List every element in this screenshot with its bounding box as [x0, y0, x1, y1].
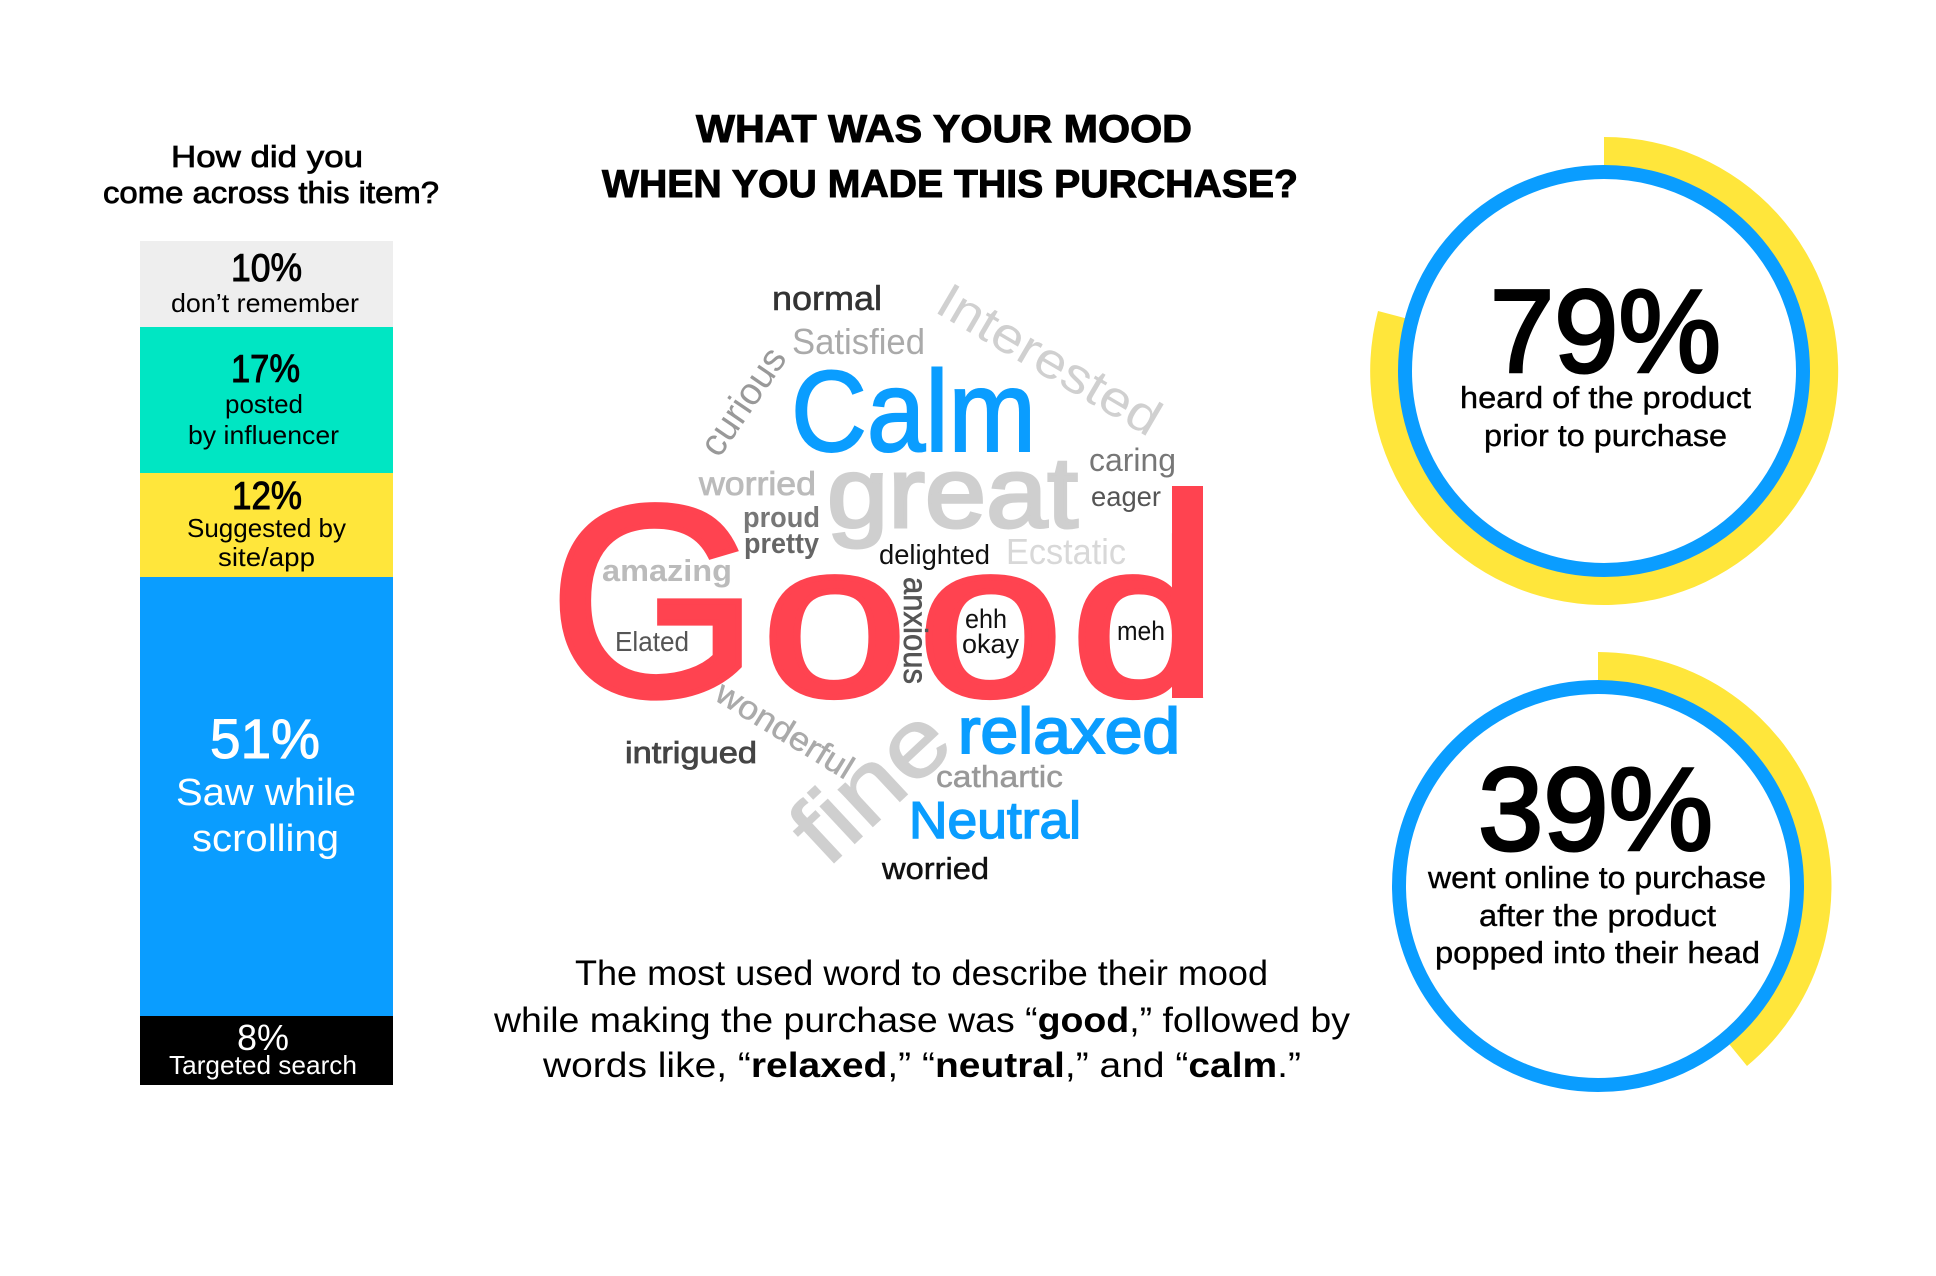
- segment: saw while scrolling 51%: Saw while: [176, 772, 356, 814]
- yellow progress arc 39%: [1598, 652, 1831, 1066]
- yellow progress arc 79%: [1370, 137, 1838, 605]
- remaining words: [602, 272, 1180, 886]
- caption: popped into their head: [1435, 935, 1760, 970]
- segment: posted by influencer 17%: posted: [225, 389, 303, 419]
- segment: saw while scrolling 51%: 51%: [210, 707, 320, 770]
- word: Ecstatic: Ecstatic: [1006, 531, 1126, 572]
- word: anxious: anxious: [897, 577, 934, 684]
- segment: suggested by site/app 12%: [140, 473, 393, 578]
- blue ring: [1405, 172, 1803, 570]
- blue ring: [1399, 687, 1797, 1085]
- summary paragraph: The most used word to describe their mood: [575, 954, 1268, 993]
- left heading: how did you come across this item: [103, 139, 439, 210]
- word: intrigued: intrigued: [625, 735, 757, 770]
- left heading: how did you come across this item: come across this item?: [103, 175, 439, 210]
- stat circle: 79% heard of the product: [1370, 137, 1838, 605]
- word: cathartic: cathartic: [936, 759, 1063, 794]
- caption: [1460, 380, 1751, 453]
- segment: suggested by site/app 12%: 12%: [232, 475, 302, 518]
- title: [602, 108, 1298, 206]
- segment: saw while scrolling 51%: scrolling: [192, 818, 339, 860]
- word: Good: G: [549, 449, 759, 753]
- summary paragraph: [493, 954, 1351, 1085]
- segment: suggested by site/app 12%: site/app: [218, 542, 315, 572]
- segment: targeted search 8%: Targeted search: [169, 1050, 357, 1080]
- word: normal: normal: [772, 280, 882, 318]
- word: pretty: pretty: [744, 528, 819, 560]
- word: okay: okay: [962, 629, 1019, 659]
- segment: posted by influencer 17%: 17%: [231, 348, 300, 391]
- word: Good: [549, 449, 1216, 753]
- word: fine: fine: [769, 685, 972, 884]
- word: Good: o: [762, 498, 907, 742]
- segment: posted by influencer 17%: [140, 327, 393, 474]
- word: proud: proud: [743, 502, 820, 534]
- segment: posted by influencer 17%: by influencer: [188, 420, 339, 450]
- caption: [1427, 860, 1766, 970]
- word: Satisfied: Satisfied: [792, 321, 925, 362]
- word: wonderful: wonderful: [708, 673, 861, 786]
- stacked bar chart: discovery source: [140, 241, 393, 1085]
- title: WHEN YOU MADE THIS PURCHASE?: [602, 163, 1298, 206]
- word cloud: [549, 272, 1216, 886]
- stat circle: 39% went online to purchase: [1399, 652, 1831, 1085]
- segment: don't remember 10%: [140, 241, 393, 327]
- word: eager: eager: [1091, 481, 1161, 512]
- caption: went online to purchase: [1427, 860, 1766, 895]
- segment: targeted search 8%: [140, 1016, 393, 1085]
- word: curious: curious: [692, 340, 795, 464]
- segment: targeted search 8%: 8%: [237, 1017, 289, 1058]
- word: worried (grey): worried: [698, 465, 816, 502]
- caption: after the product: [1479, 898, 1716, 933]
- word: Neutral: Neutral: [909, 792, 1081, 850]
- word: ehh: ehh: [965, 604, 1007, 634]
- caption: prior to purchase: [1484, 418, 1727, 453]
- caption: heard of the product: [1460, 380, 1751, 415]
- word: meh: meh: [1117, 616, 1165, 646]
- summary paragraph: words like, “ relaxed ,” “neutral ,” and “ calm .”: [542, 1046, 1301, 1085]
- word: delighted: delighted: [879, 539, 990, 570]
- word: great: great: [827, 437, 1078, 549]
- title: WHAT WAS YOUR MOOD: [696, 108, 1192, 151]
- segment: don't remember 10%: don’t remember: [171, 288, 359, 318]
- word: worried (black): worried: [881, 851, 989, 886]
- figure 39%: 39%: [1478, 744, 1713, 876]
- segment: don't remember 10%: 10%: [231, 247, 302, 290]
- segment: saw while scrolling 51%: [140, 577, 393, 1016]
- word: Interested: Interested: [927, 272, 1171, 447]
- left heading: how did you come across this item: How did you: [171, 139, 363, 174]
- word: Calm: Calm: [791, 348, 1036, 476]
- word: amazing: amazing: [602, 553, 732, 588]
- word: Elated: Elated: [615, 626, 689, 657]
- segment: suggested by site/app 12%: Suggested by: [187, 513, 346, 543]
- word: relaxed: relaxed: [958, 695, 1180, 767]
- figure 79%: 79%: [1490, 266, 1721, 398]
- word: Good: o: [918, 498, 1063, 742]
- summary paragraph: while making the purchase was “ good,” followed by: [493, 1001, 1351, 1040]
- word: Good: d: [1071, 498, 1216, 742]
- word: caring: caring: [1089, 442, 1176, 478]
